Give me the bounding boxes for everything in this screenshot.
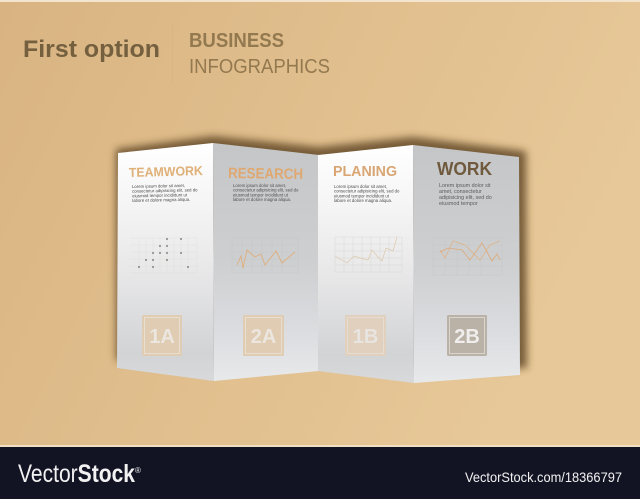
badge: 2B xyxy=(447,315,487,356)
body text: Lorem ipsum dolor sit amet, xyxy=(334,184,387,189)
body text xyxy=(132,183,198,203)
badge: 2A xyxy=(243,315,284,356)
panel: planing xyxy=(318,145,414,383)
body text: labore et dolore magna aliqua. xyxy=(334,198,392,203)
double line chart xyxy=(433,238,502,275)
header xyxy=(23,24,330,84)
body text xyxy=(233,183,299,202)
body text: Lorem ipsum dolor sit xyxy=(439,183,491,189)
image id: VectorStock.com/18366797 xyxy=(465,469,622,485)
body text: Lorem ipsum dolor sit amet, xyxy=(233,183,286,188)
body text: Lorem ipsum dolor sit amet, xyxy=(132,183,185,189)
badge: 2B: 2B xyxy=(454,326,480,348)
title: first option: First option xyxy=(23,36,160,63)
scatter chart xyxy=(130,238,197,273)
heading: research: RESEARCH xyxy=(228,165,303,183)
panel: work xyxy=(413,145,520,383)
subtitle: business infographics: INFOGRAPHICS xyxy=(189,56,330,78)
body text: consectetur adipisicing elit, sed do xyxy=(233,188,299,193)
body text: consectetur adipisicing elit, sed do xyxy=(132,187,198,194)
badge: 1B: 1B xyxy=(353,326,378,348)
body text: labore et dolore magna aliqua. xyxy=(132,197,190,203)
heading: work: WORK xyxy=(437,159,492,179)
registered mark: ® xyxy=(135,466,141,475)
line chart xyxy=(232,238,298,273)
badge: 1A xyxy=(142,315,182,356)
body text: labore et dolore magna aliqua. xyxy=(233,197,291,202)
body text xyxy=(439,183,492,207)
subtitle: business infographics: BUSINESS xyxy=(189,30,284,52)
panel: research xyxy=(213,143,319,381)
body text: eiusmod tempor incididunt ut xyxy=(233,192,289,197)
badge: 1B xyxy=(345,315,386,356)
body text: consectetur adipisicing elit, sed do xyxy=(334,189,400,194)
body text: eiusmod tempor incididunt ut xyxy=(334,193,390,198)
body text: eiusmod tempor xyxy=(439,201,478,207)
curve chart xyxy=(335,237,402,272)
subtitle: business infographics xyxy=(189,30,330,78)
body text: amet, consectetur xyxy=(439,189,482,195)
brochure shadow xyxy=(116,136,527,372)
body text: adipisicing elit, sed do xyxy=(439,195,492,201)
logo: vectorstock: VectorStock xyxy=(18,460,135,488)
panel: teamwork xyxy=(117,143,214,381)
heading: planing: PLANING xyxy=(333,164,397,180)
badge: 1A: 1A xyxy=(149,326,175,348)
badge: 2A: 2A xyxy=(251,326,276,348)
body text: eiusmod tempor incididunt ut xyxy=(132,192,188,198)
footer bar xyxy=(0,447,640,499)
body text xyxy=(334,184,400,203)
heading: teamwork: TEAMWORK xyxy=(129,163,204,180)
folded brochure xyxy=(117,143,520,383)
